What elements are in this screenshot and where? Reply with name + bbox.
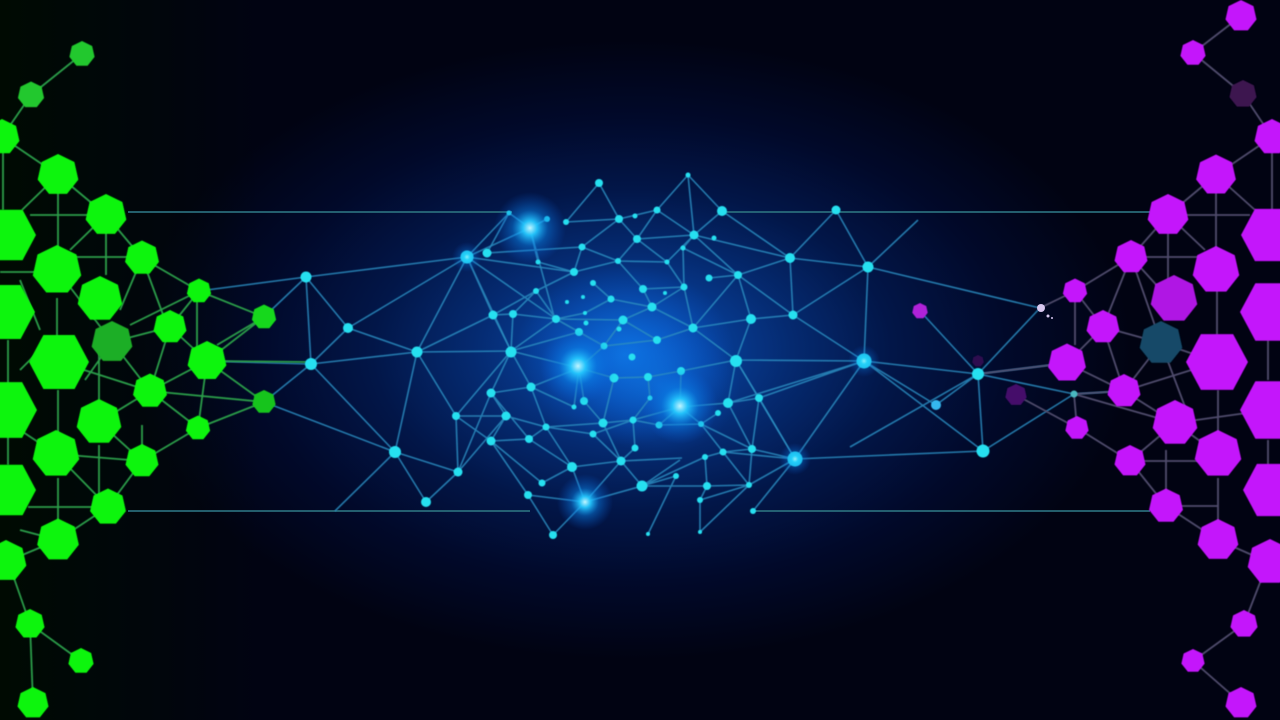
soft central glow: [515, 265, 740, 455]
bright node glows: [452, 192, 880, 530]
blue network edges: [199, 175, 1124, 535]
green connector lines: [0, 54, 306, 703]
magenta hexagon cluster: [912, 0, 1280, 717]
white broken node: [1037, 304, 1053, 319]
magenta connector lines: [978, 16, 1272, 703]
horizontal frame lines: [128, 212, 1150, 511]
green hexagon cluster: [0, 41, 276, 717]
blue network nodes: [300, 172, 1078, 539]
